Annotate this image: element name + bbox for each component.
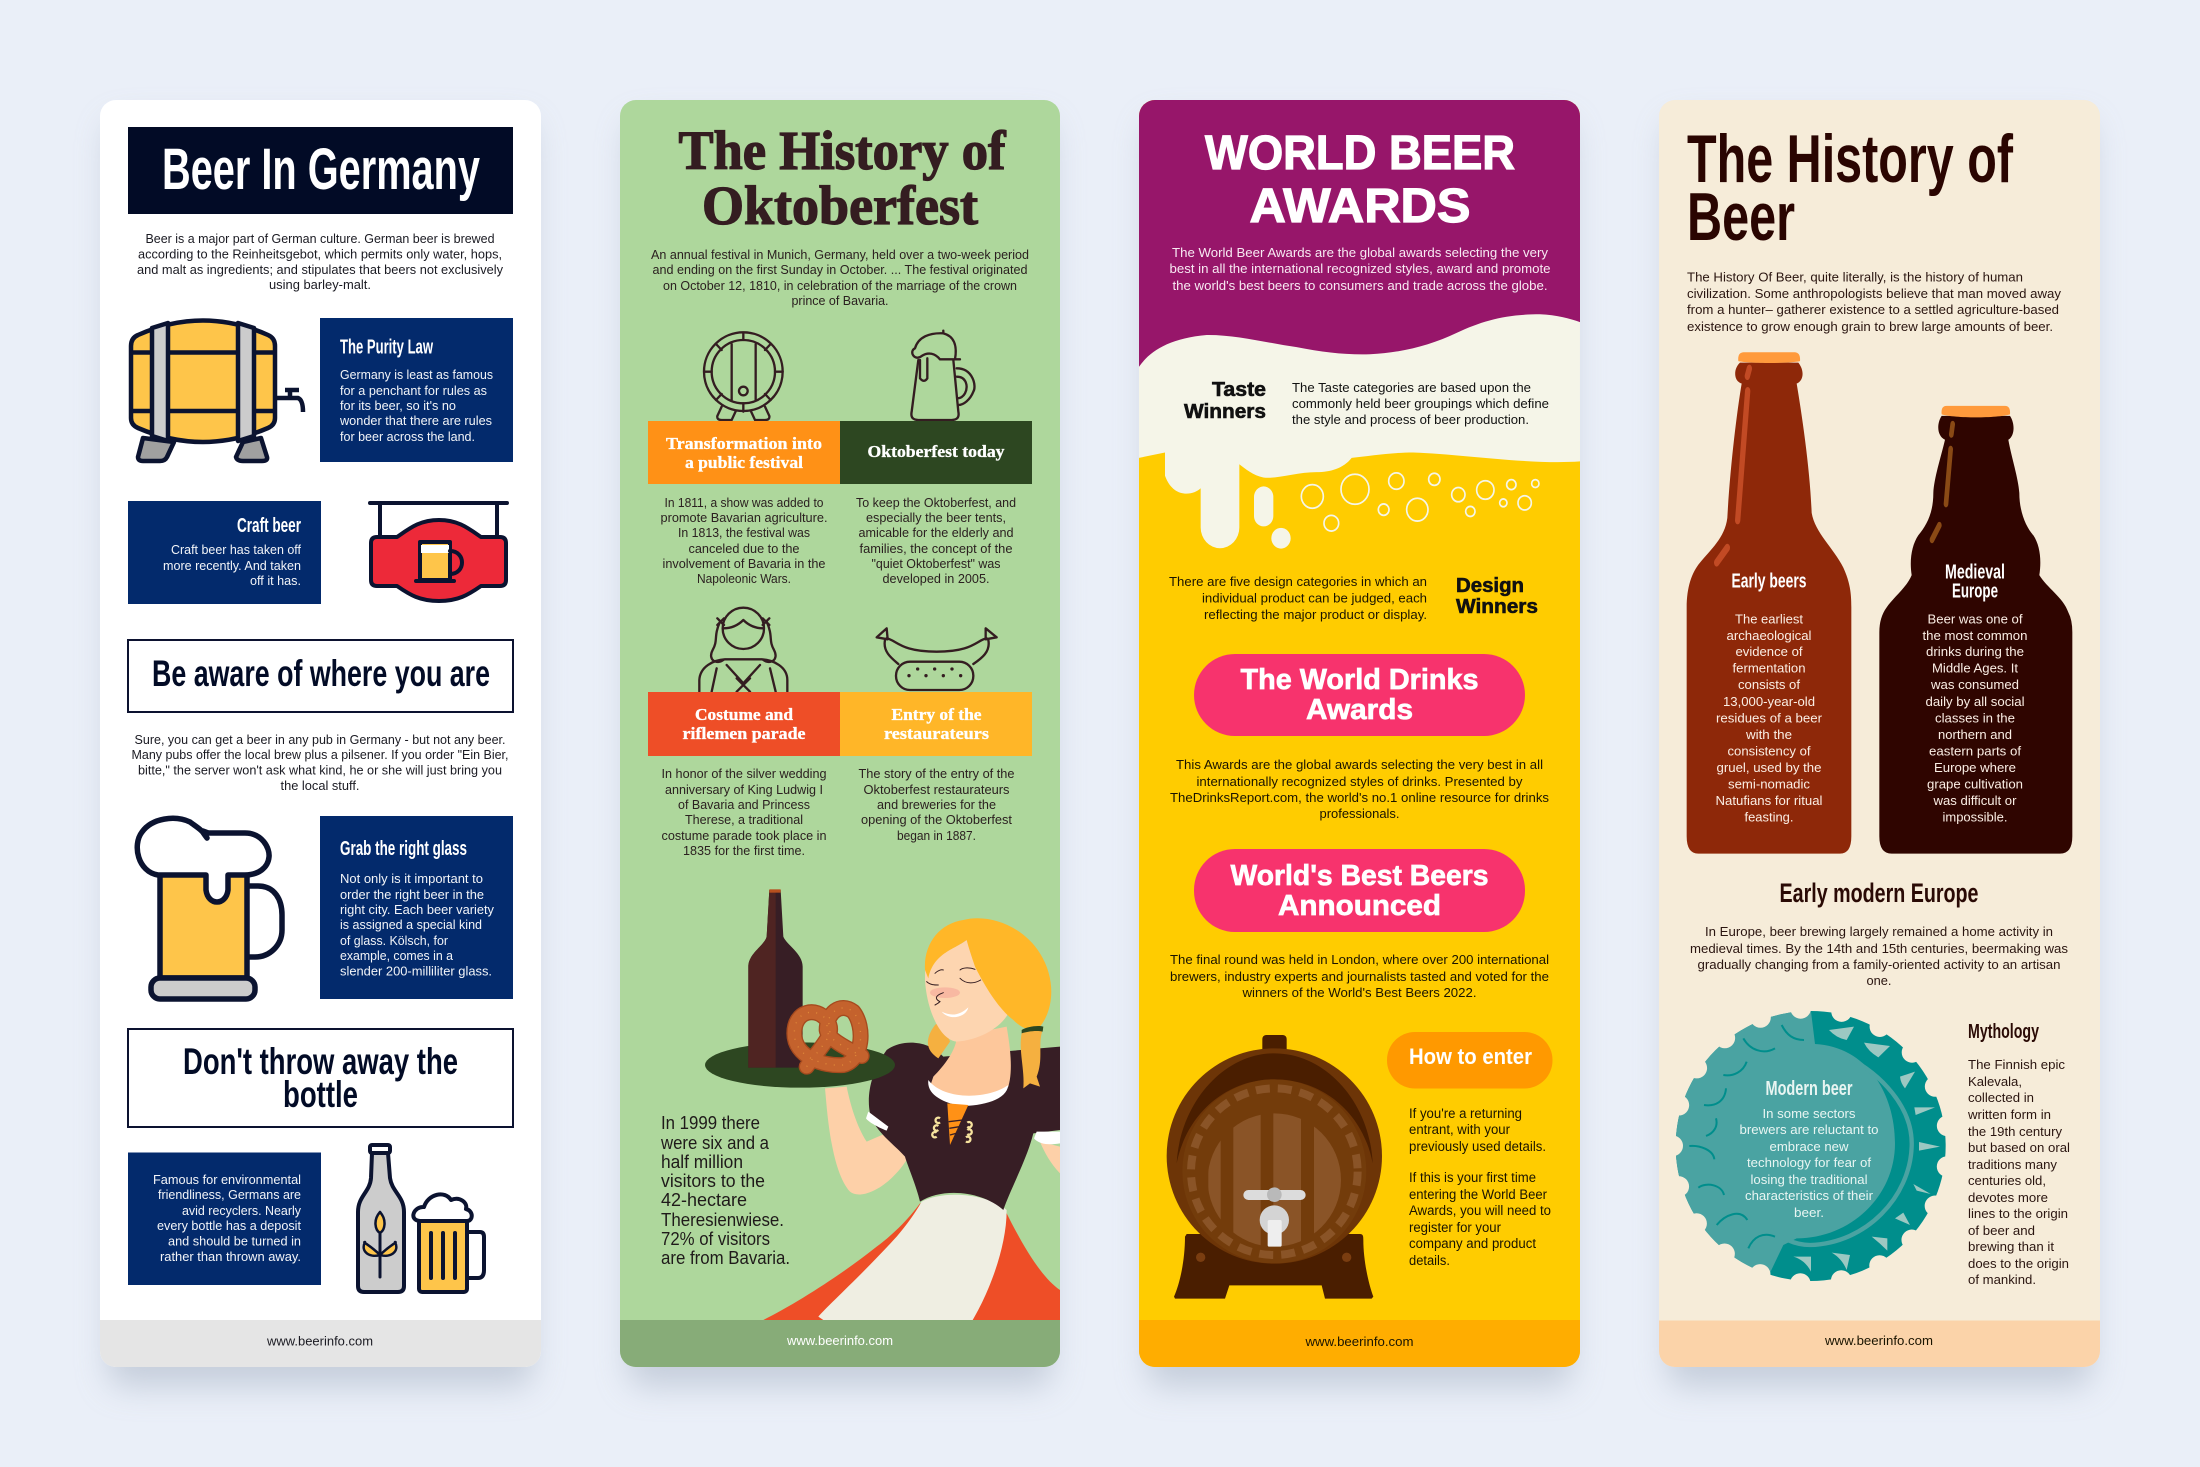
illustration: wooden barrel with tap	[1167, 1035, 1382, 1299]
bottle: Medieval Europe: daily by all social	[1926, 694, 2025, 709]
bottle: Early beers: consistency of	[1728, 744, 1811, 759]
bottle: Early beers: 13,000-year-old	[1723, 694, 1815, 709]
text: be aware: Many pubs offer the local brew plus a pilsener. If you order "Ein Bier,	[132, 747, 508, 762]
heading: Mythology: Mythology	[1968, 1021, 2040, 1043]
bottle: Early beers: Natufians for ritual	[1716, 793, 1823, 808]
text: mythology: centuries old,	[1968, 1173, 2046, 1188]
pill: World's Best Beers Announced: World's Best Beers	[1230, 860, 1488, 892]
bottle: Early beers: Early beers	[1732, 570, 1806, 592]
icon: beer mug small	[413, 1194, 484, 1292]
panel: Grab the right glass: is assigned a special kind	[340, 918, 482, 932]
heading: Taste Winners	[1184, 379, 1266, 423]
text: today: especially the beer tents,	[866, 510, 1006, 525]
intro text: according to the Reinheitsgebot, which permits only water, hops,	[138, 246, 502, 262]
foam wave with drips and bubbles	[1139, 314, 1580, 549]
footer: card 3	[1139, 1320, 1580, 1367]
text: early modern Europe: In Europe, beer brewing largely remained a home activity in	[1705, 924, 2053, 939]
icon: outline sausage and pretzel bun	[877, 628, 997, 690]
text: visitors: 42-hectare	[661, 1190, 747, 1210]
panel: Craft beer: Craft beer	[237, 515, 301, 537]
icon: bottle cap with Modern beer: brewers are reluctant to	[1740, 1122, 1878, 1137]
bottle: Medieval Europe: Europe where	[1934, 760, 2016, 775]
text: costume: In honor of the silver wedding	[662, 766, 826, 781]
text: mythology: does to the origin	[1968, 1256, 2069, 1271]
bottle: Early beers: consists of	[1738, 677, 1800, 692]
icon: beer mug with foam	[137, 818, 282, 999]
pill: The World Drinks Awards: The World Drinks	[1240, 664, 1478, 696]
panel: Craft beer: Craft beer has taken off	[171, 543, 302, 557]
panel: World Beer Awards	[1139, 100, 1580, 1367]
text: today: "quiet Oktoberfest" was	[872, 556, 1001, 571]
text: drinks awards: TheDrinksReport.com, the world's no.1 online resource for drinks	[1170, 790, 1549, 805]
text: design categories	[1169, 574, 1427, 622]
panel: Craft beer: off it has.	[250, 574, 301, 588]
icon: bottle cap with Modern beer: losing the traditional	[1750, 1172, 1868, 1187]
intro text: best in all the international recognized styles, award and promote	[1170, 261, 1550, 276]
icon: outline dirndl woman	[699, 608, 787, 692]
title: World Beer Awards	[1205, 127, 1515, 233]
text: final round: winners of the World's Best Beers 2022.	[1242, 985, 1476, 1000]
panel: recycling text: and should be turned in	[168, 1234, 301, 1248]
text: mythology: but based on oral	[1968, 1140, 2070, 1155]
pill: The World Drinks Awards	[1194, 654, 1525, 736]
icon: bottle cap with Modern beer: embrace new	[1770, 1139, 1849, 1154]
icon: bottle cap with Modern beer: Modern beer	[1766, 1078, 1853, 1100]
text: mythology: traditions many	[1968, 1157, 2057, 1172]
bottle: Medieval Europe: grape cultivation	[1927, 776, 2023, 792]
intro text	[651, 247, 1029, 308]
heading: Design Winners	[1456, 575, 1538, 618]
panel: The Purity Law	[320, 318, 513, 462]
text: design categories: There are five design categories in which an	[1169, 574, 1427, 589]
text: mythology: brewing than it	[1968, 1239, 2054, 1254]
text: taste categories: The Taste categories are based upon the	[1292, 380, 1531, 395]
panel: Grab the right glass: right city. Each beer variety	[340, 903, 495, 917]
text: costume: Therese, a traditional	[685, 812, 803, 827]
heading: Don't throw away the bottle	[128, 1029, 513, 1127]
text: design categories: individual product can be judged, each	[1202, 590, 1427, 606]
bottle: Medieval Europe	[1879, 406, 2072, 854]
intro text	[137, 231, 503, 292]
intro text: from a hunter– gatherer existence to a settled agriculture-based	[1687, 302, 2059, 317]
icon: hanging pub sign	[370, 503, 507, 601]
text: today	[856, 495, 1016, 586]
title: The History of Oktoberfest: The History of	[678, 120, 1006, 181]
text: drinks awards: professionals.	[1320, 806, 1400, 821]
text: costume: of Bavaria and Princess	[678, 797, 810, 812]
text: transformation	[660, 495, 828, 586]
text: how to enter	[1409, 1106, 1551, 1268]
bottle: Medieval Europe: northern and	[1938, 727, 2012, 742]
bottle: Medieval Europe: Europe	[1952, 580, 1998, 602]
panel: The Purity Law: for its beer, so it's no	[340, 399, 456, 413]
panel: recycling text	[128, 1152, 321, 1285]
heading: Entry of the restaurateurs	[840, 692, 1032, 756]
text: mythology: devotes more	[1968, 1190, 2048, 1205]
panel: The Purity Law: The Purity Law	[340, 336, 433, 358]
bottle: Medieval Europe: eastern parts of	[1929, 744, 2021, 759]
intro text: and malt as ingredients; and stipulates that beers not exclusively	[137, 262, 503, 277]
bottle: Early beers: The earliest	[1735, 611, 1803, 626]
footer: card 2	[620, 1320, 1060, 1367]
text: mythology: collected in	[1968, 1090, 2034, 1105]
bottle: Medieval Europe: Middle Ages. It	[1932, 661, 2018, 676]
title: The History of Beer	[1687, 121, 2013, 255]
text: mythology	[1967, 1057, 2070, 1287]
heading: Entry of the restaurateurs: restaurateurs	[884, 724, 989, 743]
bottle: Medieval Europe: impossible.	[1942, 809, 2008, 824]
intro text	[1170, 245, 1550, 293]
heading: Costume and riflemen parade: Costume and	[695, 705, 794, 724]
text: mythology: of beer and	[1968, 1223, 2035, 1238]
text: transformation: In 1813, the festival was	[678, 525, 810, 540]
text: final round	[1170, 952, 1549, 1000]
text: today: developed in 2005.	[882, 571, 990, 586]
intro text: The History Of Beer, quite literally, is the history of human	[1687, 270, 2023, 284]
pill: World's Best Beers Announced: Announced	[1278, 890, 1441, 922]
heading: Design Winners: Design	[1456, 575, 1524, 597]
panel: The Purity Law: wonder that there are rules	[339, 414, 492, 428]
text: visitors: In 1999 there	[661, 1113, 760, 1133]
heading: Early modern Europe: Early modern Europe	[1780, 878, 1978, 908]
text: mythology: the 19th century	[1968, 1124, 2062, 1139]
title: Beer In Germany	[128, 127, 513, 214]
title: The History of Beer: Beer	[1687, 179, 1795, 255]
text: costume: anniversary of King Ludwig I	[665, 782, 823, 797]
text: final round: The final round was held in London, where over 200 international	[1170, 952, 1549, 967]
heading: Don't throw away the bottle: Don't throw away the	[183, 1041, 458, 1082]
text: restaurateurs	[858, 766, 1014, 843]
bottle: Early beers: gruel, used by the	[1716, 760, 1822, 775]
heading: Costume and riflemen parade	[648, 692, 840, 756]
panel: Grab the right glass	[320, 816, 513, 999]
panel: Grab the right glass: of glass. Kölsch, for	[340, 934, 448, 948]
heading: Transformation into a public festival: Transformation into	[666, 434, 822, 453]
footer: card 4: www.beerinfo.com	[1824, 1333, 1933, 1348]
text: be aware: the local stuff.	[280, 778, 360, 793]
intro text: prince of Bavaria.	[792, 293, 888, 308]
icon: bottle with wheat	[358, 1145, 404, 1292]
panel: recycling text: rather than thrown away.	[160, 1250, 301, 1264]
text: how to enter: company and product	[1409, 1236, 1536, 1251]
bottle: Medieval Europe: Beer was one of	[1928, 611, 2023, 626]
text: restaurateurs: and breweries for the	[877, 797, 996, 812]
bottle: Early beers: feasting.	[1744, 809, 1794, 824]
text: transformation: promote Bavarian agriculture.	[660, 510, 828, 525]
text: restaurateurs: The story of the entry of the	[858, 766, 1014, 781]
intro text: the world's best beers to consumers and trade across the globe.	[1172, 278, 1548, 293]
heading: Entry of the restaurateurs: Entry of the	[892, 705, 982, 724]
heading: Don't throw away the bottle: bottle	[283, 1074, 358, 1115]
text: visitors: Theresienwiese.	[661, 1210, 784, 1230]
text: visitors: 72% of visitors	[661, 1229, 770, 1249]
text: early modern Europe	[1690, 924, 2068, 988]
panel: The Purity Law: Germany is least as famous	[340, 368, 493, 382]
text: design categories: reflecting the major product or display.	[1204, 607, 1427, 622]
bottle: Medieval Europe: classes in the	[1935, 710, 2015, 725]
text: how to enter: If this is your first time	[1409, 1170, 1536, 1185]
icon: bottle cap with Modern beer: In some sectors	[1762, 1106, 1856, 1121]
text: how to enter: entering the World Beer	[1409, 1187, 1547, 1202]
text: be aware: bitte," the server won't ask what kind, he or she will just bring you	[138, 762, 502, 778]
panel: recycling text: avid recyclers. Nearly	[182, 1204, 302, 1218]
heading: Be aware of where you are: Be aware of where you are	[152, 653, 490, 694]
text: mythology: written form in	[1967, 1107, 2051, 1122]
icon: bottle cap with Modern beer: technology for fear of	[1747, 1155, 1871, 1170]
text: transformation: canceled due to the	[688, 541, 800, 556]
heading: Taste Winners: Winners	[1184, 401, 1266, 423]
panel: recycling text: Famous for environmental	[153, 1173, 301, 1187]
text: how to enter: register for your	[1409, 1220, 1501, 1235]
panel: The History of Beer	[1650, 100, 2100, 1368]
heading: Taste Winners: Taste	[1212, 379, 1266, 401]
text: mythology: lines to the origin	[1968, 1206, 2068, 1221]
text: mythology: Kalevala,	[1968, 1074, 2022, 1089]
title: The History of Oktoberfest: Oktoberfest	[702, 175, 979, 236]
text: mythology: of mankind.	[1968, 1272, 2036, 1287]
text: drinks awards: internationally recognized styles of drinks. Presented by	[1196, 774, 1523, 789]
panel: Grab the right glass: example, comes in a	[340, 949, 453, 963]
bottle: Early beers: residues of a beer	[1716, 710, 1823, 725]
intro text: Beer is a major part of German culture. German beer is brewed	[146, 231, 494, 246]
text: mythology: The Finnish epic	[1968, 1057, 2065, 1072]
text: early modern Europe: gradually changing from a family-oriented activity to an artisan	[1698, 957, 2060, 972]
heading: Oktoberfest today: Oktoberfest today	[868, 442, 1005, 461]
heading: Transformation into a public festival: a public festival	[685, 453, 803, 472]
text: be aware	[132, 732, 508, 793]
icon: outline barrel	[704, 332, 783, 420]
footer: card 3: www.beerinfo.com	[1304, 1334, 1414, 1349]
panel: Grab the right glass: order the right beer in the	[340, 888, 484, 902]
text: how to enter: previously used details.	[1409, 1139, 1546, 1154]
bottle: Early beers: evidence of	[1736, 644, 1803, 659]
text: visitors	[660, 1113, 790, 1268]
panel: Craft beer	[128, 501, 321, 604]
icon: barrel with tap	[131, 320, 303, 461]
intro text: and ending on the first Sunday in October. ... The festival originated	[652, 262, 1028, 277]
heading: Costume and riflemen parade: riflemen parade	[682, 724, 806, 743]
text: be aware: Sure, you can get a beer in any pub in Germany - but not any beer.	[134, 732, 506, 747]
text: final round: brewers, industry experts and journalists tasted and voted for the	[1170, 969, 1549, 984]
pill: World's Best Beers Announced	[1194, 849, 1525, 932]
title: World Beer Awards: AWARDS	[1250, 180, 1470, 233]
heading: Design Winners: Winners	[1456, 596, 1538, 618]
text: taste categories: the style and process of beer production.	[1292, 412, 1529, 427]
bottle: Early beers: fermentation	[1732, 661, 1806, 676]
panel: recycling text: friendliness, Germans are	[158, 1188, 301, 1202]
intro text: The World Beer Awards are the global awards selecting the very	[1172, 245, 1548, 260]
bottle: Early beers	[1687, 352, 1851, 854]
panel: Grab the right glass: slender 200-milliliter glass.	[340, 964, 492, 978]
panel: recycling text: every bottle has a deposit	[157, 1219, 302, 1233]
title: The History of Beer: The History of	[1687, 121, 2013, 197]
panel: The Purity Law: for a penchant for rules as	[340, 384, 487, 398]
heading: Be aware of where you are	[128, 640, 513, 712]
text: how to enter: Awards, you will need to	[1409, 1203, 1551, 1218]
text: costume: costume parade took place in	[662, 828, 826, 843]
text: restaurateurs: Oktoberfest restaurateurs	[864, 782, 1010, 797]
text: taste categories: commonly held beer groupings which define	[1292, 396, 1549, 411]
panel: Craft beer: more recently. And taken	[163, 559, 301, 573]
footer: card 1	[100, 1320, 541, 1367]
intro text: existence to grow enough grain to brew large amounts of beer.	[1687, 319, 2053, 334]
text: today: To keep the Oktoberfest, and	[856, 495, 1016, 510]
text: today: amicable for the elderly and	[858, 525, 1014, 540]
text: visitors: were six and a	[660, 1133, 770, 1153]
text: today: families, the concept of the	[860, 541, 1012, 556]
bottle: Medieval Europe: was consumed	[1930, 677, 2019, 692]
bottle: Medieval Europe: was difficult or	[1932, 793, 2017, 808]
intro text: on October 12, 1810, in celebration of the marriage of the crown	[663, 278, 1017, 293]
title: Beer In Germany: Beer In Germany	[162, 137, 480, 202]
intro text: civilization. Some anthropologists believe that man moved away	[1687, 286, 2061, 301]
footer: card 1: www.beerinfo.com	[266, 1334, 373, 1348]
illustration: waitress with tray, bottle and pretzel	[705, 889, 1060, 1320]
text: transformation: involvement of Bavaria in the	[662, 556, 826, 571]
text: costume: 1835 for the first time.	[683, 843, 805, 858]
pill: How to enter: How to enter	[1409, 1044, 1532, 1069]
text: visitors: visitors to the	[661, 1171, 765, 1191]
icon: outline beer stein	[911, 331, 974, 420]
panel: Beer In Germany	[100, 100, 541, 1367]
intro text	[1687, 270, 2061, 334]
intro text: using barley-malt.	[269, 277, 371, 292]
text: how to enter: details.	[1409, 1253, 1450, 1268]
panel: Grab the right glass: Grab the right glass	[340, 838, 467, 860]
heading: Transformation into a public festival	[648, 421, 840, 484]
title: The History of Oktoberfest	[678, 129, 1007, 226]
text: early modern Europe: one.	[1866, 973, 1892, 988]
text: restaurateurs: began in 1887.	[897, 828, 976, 843]
footer: card 2: www.beerinfo.com	[786, 1334, 893, 1348]
text: how to enter: entrant, with your	[1409, 1122, 1510, 1137]
bottle: Medieval Europe: drinks during the	[1926, 644, 2024, 659]
bottle: Medieval Europe: Medieval	[1945, 562, 2005, 584]
bottle: Medieval Europe: the most common	[1922, 628, 2028, 643]
pill: How to enter	[1387, 1032, 1552, 1088]
text: drinks awards	[1170, 757, 1549, 821]
panel: The Purity Law: for beer across the land.	[340, 430, 475, 444]
text: drinks awards: This Awards are the global awards selecting the very best in all	[1176, 757, 1543, 772]
text: early modern Europe: medieval times. By the 14th and 15th centuries, beermaking was	[1690, 941, 2068, 956]
icon: bottle cap with Modern beer	[1650, 1003, 1949, 1284]
icon: bottle cap with Modern beer: beer.	[1794, 1205, 1824, 1220]
text: transformation: Napoleonic Wars.	[697, 571, 791, 586]
text: visitors: are from Bavaria.	[661, 1248, 790, 1268]
footer: card 4	[1659, 1320, 2100, 1368]
text: visitors: half million	[661, 1152, 743, 1172]
panel: Grab the right glass: Not only is it important to	[340, 872, 483, 886]
bottle: Early beers: archaeological	[1726, 628, 1812, 643]
text: restaurateurs: opening of the Oktoberfest	[861, 812, 1012, 827]
bottle: Early beers: with the	[1745, 727, 1792, 742]
text: taste categories	[1292, 380, 1549, 427]
text: transformation: In 1811, a show was added to	[664, 495, 824, 510]
text: how to enter: If you're a returning	[1409, 1106, 1522, 1121]
icon: bottle cap with Modern beer: characteristics of their	[1745, 1188, 1874, 1203]
title: World Beer Awards: WORLD BEER	[1205, 127, 1515, 180]
text: costume	[662, 766, 826, 858]
panel: The History of Oktoberfest	[620, 100, 1060, 1367]
heading: Oktoberfest today	[840, 421, 1032, 484]
bottle: Early beers: semi-nomadic	[1728, 776, 1810, 792]
pill: The World Drinks Awards: Awards	[1306, 694, 1413, 726]
intro text: An annual festival in Munich, Germany, held over a two-week period	[651, 247, 1029, 262]
